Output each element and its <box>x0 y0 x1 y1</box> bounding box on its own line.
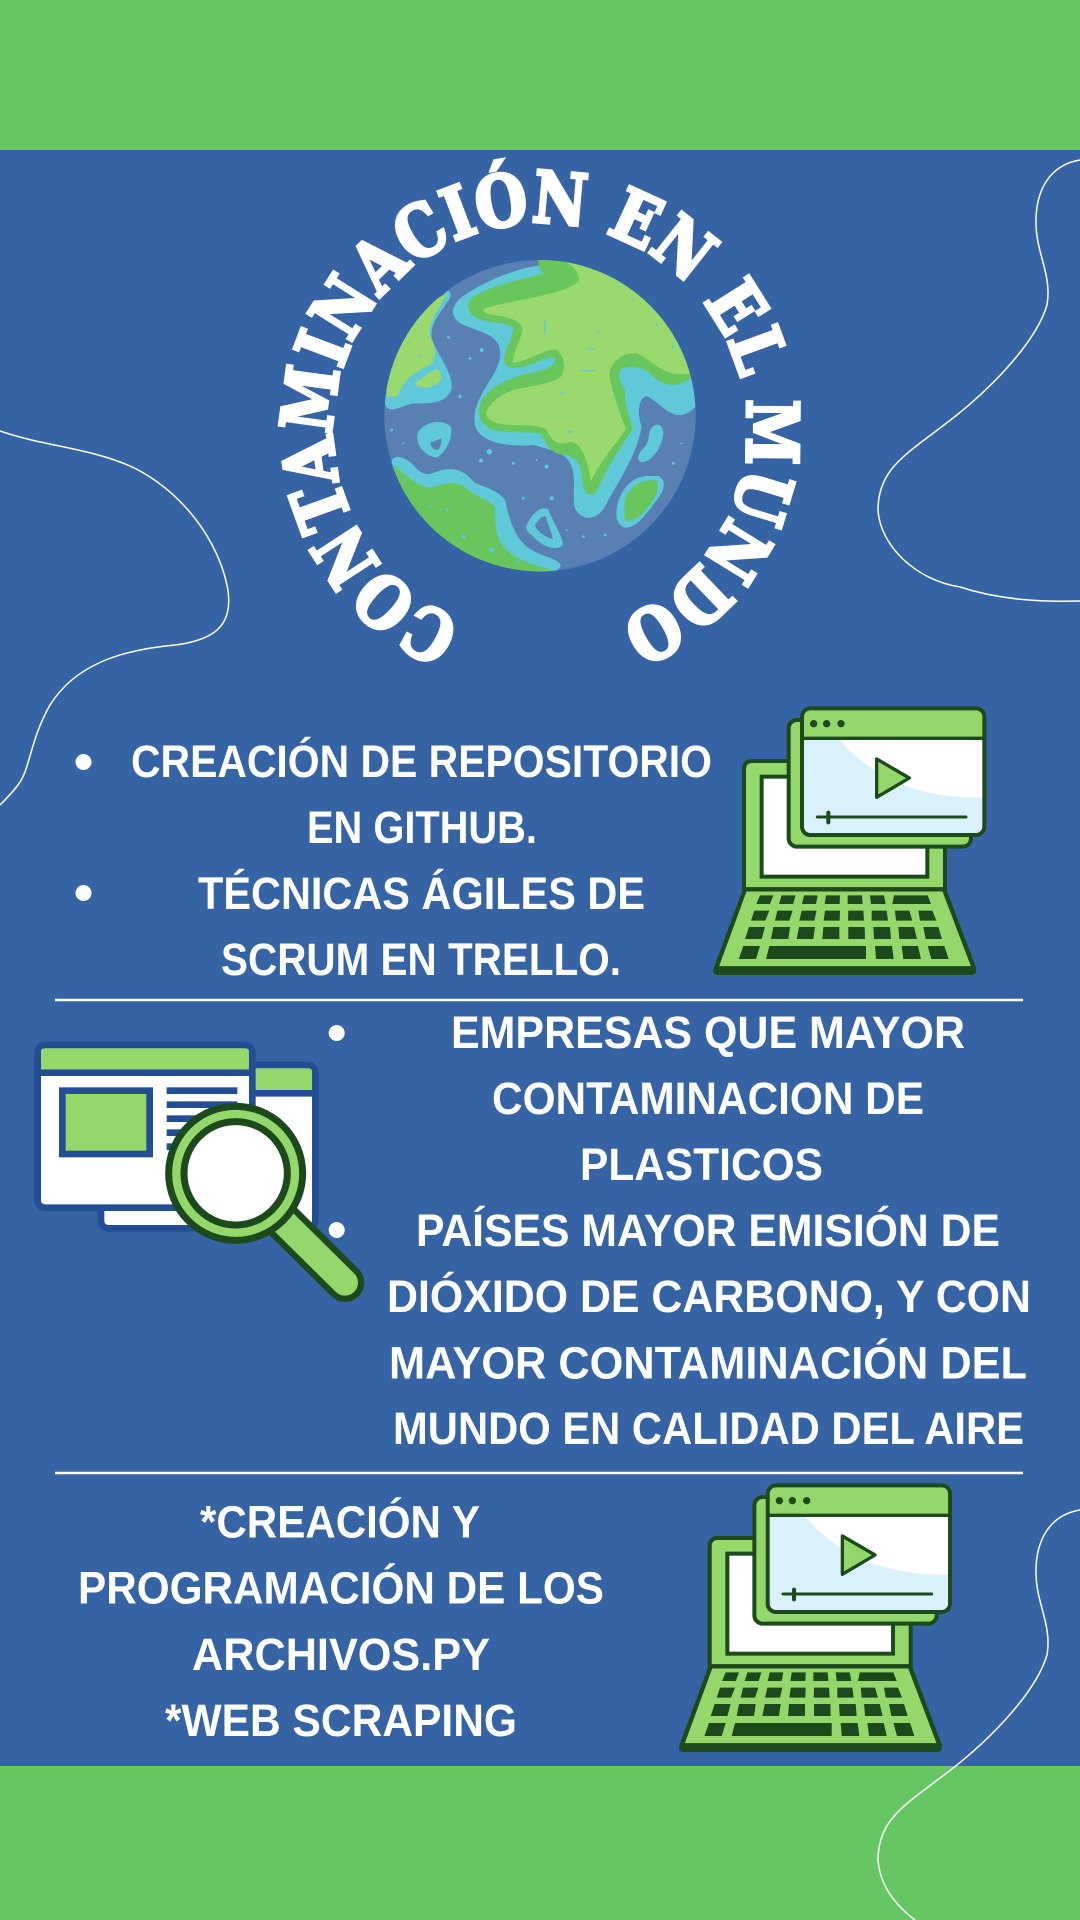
line: CONTAMINACION DE <box>492 1073 924 1124</box>
globe texture specks <box>390 299 683 563</box>
line: MAYOR CONTAMINACIÓN DEL <box>389 1338 1027 1388</box>
title curved around the globe: CONTAMINACIÓN EN EL MUNDO <box>278 157 801 662</box>
line: CREACIÓN DE REPOSITORIO <box>131 736 712 787</box>
line: PROGRAMACIÓN DE LOS <box>78 1562 604 1614</box>
line: *WEB SCRAPING <box>165 1695 517 1746</box>
main continent <box>452 260 696 518</box>
line: TÉCNICAS ÁGILES DE <box>198 868 645 919</box>
line: *CREACIÓN Y <box>200 1496 480 1548</box>
islands <box>417 422 664 548</box>
line: EN GITHUB. <box>307 802 537 853</box>
section 1 text <box>76 736 712 985</box>
globe illustration <box>384 260 696 572</box>
line: ARCHIVOS.PY <box>192 1629 490 1680</box>
icon: web pages with magnifying glass <box>38 1045 345 1283</box>
line: DIÓXIDO DE CARBONO, Y CON <box>387 1271 1031 1322</box>
line: SCRUM EN TRELLO. <box>221 934 621 985</box>
line: PAÍSES MAYOR EMISIÓN DE <box>416 1205 1000 1256</box>
left continent <box>377 291 452 409</box>
line: PLASTICOS <box>580 1139 823 1190</box>
line: MUNDO EN CALIDAD DEL AIRE <box>393 1403 1024 1454</box>
top green band <box>0 0 1080 150</box>
bullets <box>76 754 92 901</box>
icon: laptop with video window (second) <box>679 1485 950 1752</box>
bottom green band <box>0 1766 1080 1920</box>
icon: laptop with video window <box>713 708 984 975</box>
bullets <box>329 1025 345 1238</box>
section 2 text <box>329 1007 1031 1454</box>
southern continent <box>391 456 561 572</box>
line: EMPRESAS QUE MAYOR <box>451 1007 965 1058</box>
section 3 text <box>78 1496 604 1746</box>
